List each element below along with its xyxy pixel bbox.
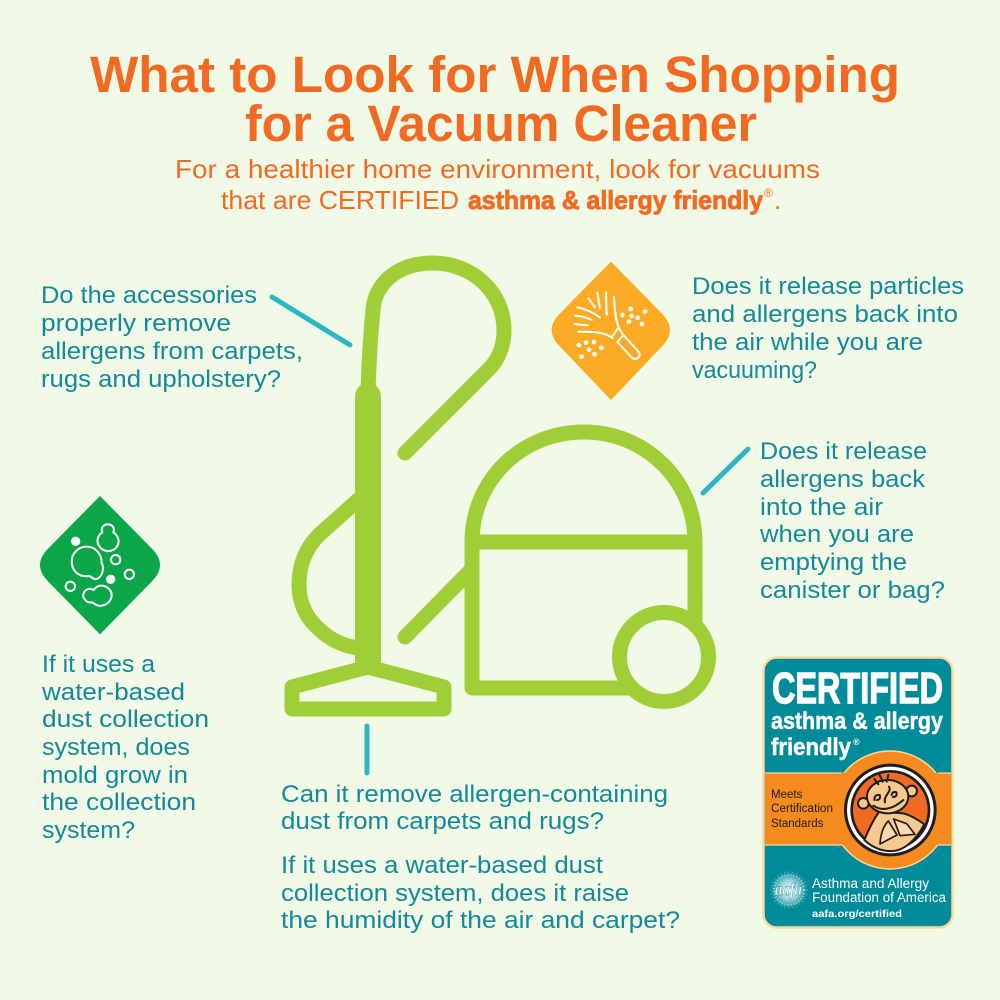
text: carpets question: dust from carpets and rugs? bbox=[281, 808, 604, 835]
badge heading bbox=[771, 664, 943, 761]
wheel bbox=[620, 612, 708, 702]
badge heading: asthma & allergy bbox=[771, 708, 943, 735]
pointer: nozzle bbox=[364, 726, 370, 773]
icon: green diamond with mold bbox=[40, 496, 160, 634]
text: humidity question bbox=[281, 852, 680, 934]
foundation name: Foundation of America bbox=[812, 890, 946, 905]
badge standards text bbox=[771, 789, 833, 830]
hose bbox=[368, 263, 504, 453]
text: accessories question: Do the accessories bbox=[41, 282, 257, 309]
text: particles question: the air while you are bbox=[692, 329, 923, 356]
text: accessories question bbox=[41, 282, 303, 393]
text: particles question bbox=[692, 273, 964, 384]
baby seal bbox=[844, 764, 937, 856]
text: mold question: the collection bbox=[42, 789, 196, 816]
orange band bbox=[765, 751, 951, 869]
text: humidity question: collection system, does it raise bbox=[281, 880, 629, 907]
text: emptying question: emptying the bbox=[760, 549, 907, 576]
floor nozzle bbox=[292, 667, 444, 709]
subtitle: asthma & allergy friendly bbox=[468, 185, 764, 215]
subtitle: ® bbox=[764, 186, 773, 200]
vacuum cleaner illustration bbox=[292, 263, 708, 709]
text: carpets question: Can it remove allergen-containing bbox=[281, 781, 668, 808]
title: for a Vacuum Cleaner bbox=[245, 95, 757, 152]
foundation name: aafa.org/certified bbox=[812, 908, 902, 920]
badge standards text: Meets bbox=[771, 789, 803, 801]
badge background bbox=[764, 658, 952, 928]
text: accessories question: allergens from carpets, bbox=[41, 338, 303, 365]
subtitle: that are CERTIFIED bbox=[221, 185, 459, 215]
icon: orange diamond with duster bbox=[552, 262, 670, 400]
text: carpets question bbox=[281, 781, 668, 835]
text: humidity question: the humidity of the air and carpet? bbox=[281, 907, 680, 934]
text: mold question bbox=[41, 651, 209, 844]
certification badge bbox=[764, 658, 952, 928]
text: mold question: If it uses a bbox=[42, 651, 155, 678]
connector tube bbox=[405, 571, 470, 637]
text: mold question: system? bbox=[42, 817, 135, 844]
canister body bbox=[472, 432, 695, 688]
text: emptying question: when you are bbox=[759, 521, 914, 548]
text: particles question: and allergens back into bbox=[692, 301, 958, 328]
title: What to Look for When Shopping bbox=[90, 46, 900, 103]
badge standards text: Standards bbox=[771, 818, 824, 830]
aafa logo: aafa bbox=[775, 879, 802, 899]
text: mold question: system, does bbox=[42, 734, 190, 761]
subtitle bbox=[175, 154, 820, 215]
text: particles question: vacuuming? bbox=[692, 357, 817, 384]
badge heading: CERTIFIED bbox=[772, 664, 943, 713]
canister divider bbox=[472, 534, 695, 550]
power cord loop bbox=[299, 500, 358, 648]
text: humidity question: If it uses a water-based dust bbox=[281, 852, 603, 879]
text: accessories question: rugs and upholstery? bbox=[41, 366, 281, 393]
text: mold question: water-based bbox=[41, 679, 185, 706]
text: emptying question: Does it release bbox=[760, 438, 927, 465]
text: particles question: Does it release particles bbox=[692, 273, 964, 300]
foundation name bbox=[812, 876, 946, 920]
pointer: accessories bbox=[272, 297, 350, 345]
text: mold question: dust collection bbox=[42, 706, 209, 733]
text: emptying question: into the air bbox=[760, 494, 883, 521]
text: mold question: mold grow in bbox=[42, 762, 188, 789]
title bbox=[90, 46, 900, 152]
badge heading: ® bbox=[853, 737, 860, 747]
badge standards text: Certification bbox=[771, 803, 833, 815]
badge heading: friendly bbox=[771, 734, 851, 761]
text: accessories question: properly remove bbox=[41, 310, 231, 337]
subtitle: . bbox=[774, 185, 781, 215]
text: emptying question: canister or bag? bbox=[760, 577, 945, 604]
aafa logo bbox=[771, 872, 807, 908]
text: emptying question: allergens back bbox=[760, 466, 926, 493]
text: emptying question bbox=[759, 438, 945, 604]
wand bbox=[355, 385, 381, 672]
pointer: canister bbox=[703, 449, 748, 493]
foundation name: Asthma and Allergy bbox=[812, 876, 929, 891]
subtitle: For a healthier home environment, look for vacuums bbox=[175, 154, 820, 184]
